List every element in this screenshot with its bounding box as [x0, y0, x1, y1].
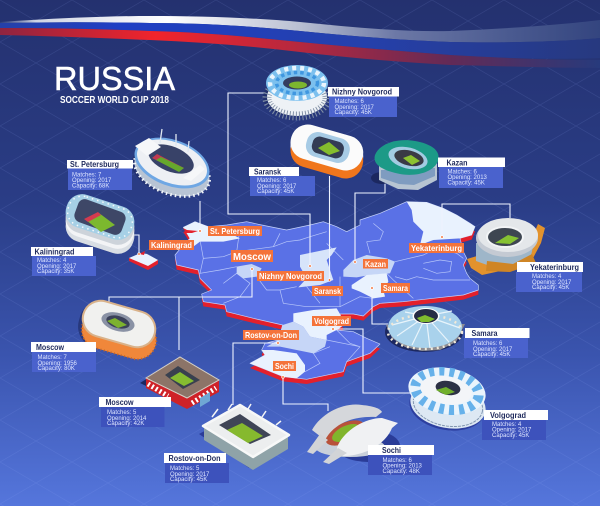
- map pins: [138, 230, 443, 378]
- label: Moscow Spartak: Matches: 5: [107, 410, 137, 416]
- label: Volgograd: [482, 410, 548, 440]
- label: Moscow Luzhniki: [31, 342, 96, 372]
- stadium: Kazan: [371, 140, 439, 190]
- label: Kazan: Kazan: [446, 158, 468, 168]
- label: Sochi: [368, 445, 434, 475]
- label: Sochi: Opening: 2013: [382, 464, 423, 470]
- label: Moscow Luzhniki: Capacity: 80K: [38, 366, 75, 372]
- map extrusion: [175, 206, 478, 384]
- stadium: Kaliningrad: [61, 190, 139, 258]
- label: Moscow Spartak: Capacity: 42K: [107, 421, 144, 427]
- label: Sochi: Sochi: [382, 446, 401, 455]
- label: Rostov-on-Don: Matches: 5: [170, 466, 200, 472]
- stadium: Yekaterinburg: [467, 218, 545, 275]
- region: Kazan: [343, 255, 395, 277]
- label: Samara: [464, 328, 530, 358]
- title: SOCCER WORLD CUP 2018: [60, 95, 169, 106]
- region: Yekaterinburg: [407, 202, 475, 245]
- flag ribbon: [0, 16, 600, 68]
- label: Saransk: Matches: 6: [257, 178, 287, 184]
- label: Moscow Spartak: Moscow: [106, 398, 134, 407]
- map surface: [175, 202, 478, 379]
- label: Yekaterinburg: Capacity: 45K: [532, 285, 569, 291]
- map of Russia: [175, 202, 478, 384]
- city tag: Volgograd: Volgograd: [314, 317, 349, 326]
- city tag: St. Petersburg: St. Petersburg: [210, 227, 260, 236]
- label: Volgograd: Capacity: 45K: [492, 433, 529, 439]
- label: Nizhny Novgorod: Matches: 6: [334, 99, 365, 105]
- label: Kaliningrad: [31, 247, 96, 276]
- label: Nizhny Novgorod: Nizhny Novgorod: [332, 88, 392, 97]
- label: Sochi: Capacity: 48K: [382, 469, 420, 475]
- label: Volgograd: Matches: 4: [492, 422, 522, 428]
- label: St. Petersburg: St. Petersburg: [70, 160, 119, 169]
- city tag: Kaliningrad: Kaliningrad: [151, 241, 192, 250]
- label: Kaliningrad: Opening: 2017: [37, 264, 77, 270]
- city tag: Kazan: Kazan: [365, 260, 386, 269]
- label: St. Petersburg: Opening: 2017: [72, 178, 112, 184]
- label: St. Petersburg: [67, 160, 133, 190]
- label: Volgograd: Volgograd: [490, 411, 526, 420]
- region: Sochi: [250, 350, 305, 378]
- region: Rostov-on-Don: [267, 322, 327, 353]
- label: Rostov-on-Don: [164, 453, 229, 483]
- label: Samara: Opening: 2017: [473, 347, 513, 353]
- label: Moscow Spartak: Opening: 2014: [107, 416, 147, 422]
- label: Yekaterinburg: Opening: 2017: [532, 280, 572, 286]
- city tag: Rostov-on-Don: Rostov-on-Don: [245, 331, 297, 340]
- label: Rostov-on-Don: Capacity: 45K: [170, 477, 207, 483]
- label: Saransk: Capacity: 45K: [257, 189, 294, 195]
- label: Samara: Capacity: 45K: [473, 352, 510, 358]
- label: Kazan: Matches: 6: [448, 170, 478, 176]
- region: Volgograd: [293, 308, 343, 340]
- stadium: St. Petersburg: [125, 128, 217, 206]
- region: St. Petersburg: [183, 222, 240, 247]
- label: Yekaterinburg: [516, 262, 583, 292]
- label: Saransk: Saransk: [254, 167, 281, 176]
- city tag: Yekaterinburg: Yekaterinburg: [411, 244, 462, 253]
- connector lines: [109, 93, 510, 411]
- region borders: [200, 223, 470, 372]
- city tag: Saransk: Saransk: [314, 287, 341, 296]
- red islet near St. Petersburg: [183, 228, 198, 233]
- label: Rostov-on-Don: Rostov-on-Don: [168, 454, 221, 463]
- stadium: Saransk: [286, 120, 367, 183]
- title: RUSSIA: [54, 60, 175, 97]
- region: Nizhny Novgorod: [298, 247, 337, 287]
- stadium: Nizhny Novgorod: [263, 65, 328, 116]
- city tag: Moscow: Moscow: [233, 251, 272, 263]
- label: Moscow Luzhniki: Matches: 7: [38, 355, 68, 361]
- city tag: Samara: Samara: [383, 284, 408, 293]
- label: Nizhny Novgorod: Capacity: 45K: [334, 110, 372, 116]
- label: Kazan: Capacity: 45K: [448, 180, 485, 186]
- label: Samara: Matches: 6: [473, 341, 503, 347]
- region: Moscow: [237, 264, 262, 278]
- stadium: Samara: [385, 306, 465, 352]
- label: St. Petersburg: Capacity: 68K: [72, 183, 109, 189]
- label: Moscow Luzhniki: Moscow: [36, 343, 65, 352]
- city tag: Nizhny Novgorod: Nizhny Novgorod: [259, 272, 322, 281]
- label: St. Petersburg: Matches: 7: [72, 172, 102, 178]
- label: Saransk: [249, 167, 315, 196]
- stadium: Rostov-on-Don: [199, 404, 289, 470]
- label: Kazan: [438, 158, 505, 188]
- label: Samara: Samara: [472, 329, 498, 338]
- region: Samara: [352, 273, 388, 298]
- stadium: Volgograd: [405, 362, 489, 436]
- label: Kazan: Opening: 2013: [448, 175, 488, 181]
- label: Yekaterinburg: Yekaterinburg: [530, 263, 579, 272]
- label: Yekaterinburg: Matches: 4: [532, 274, 562, 280]
- label: Sochi: Matches: 6: [382, 458, 413, 464]
- label: Nizhny Novgorod: [328, 87, 399, 117]
- label: Nizhny Novgorod: Opening: 2017: [334, 105, 375, 111]
- label: Volgograd: Opening: 2017: [492, 428, 532, 434]
- city tag: Sochi: Sochi: [275, 362, 294, 371]
- label: Saransk: Opening: 2017: [257, 184, 297, 190]
- label: Rostov-on-Don: Opening: 2017: [170, 472, 210, 478]
- Kaliningrad exclave: [129, 251, 158, 270]
- stadium: Moscow Spartak: [140, 357, 219, 409]
- label: Kaliningrad: Matches: 4: [37, 258, 67, 264]
- label: Moscow Spartak: [99, 397, 171, 427]
- label: Kaliningrad: Kaliningrad: [34, 248, 75, 256]
- stadium: Sochi: [307, 404, 400, 464]
- label: Moscow Luzhniki: Opening: 1956: [38, 361, 78, 367]
- stadium: Moscow Luzhniki: [73, 295, 161, 364]
- label: Kaliningrad: Capacity: 35K: [37, 269, 74, 275]
